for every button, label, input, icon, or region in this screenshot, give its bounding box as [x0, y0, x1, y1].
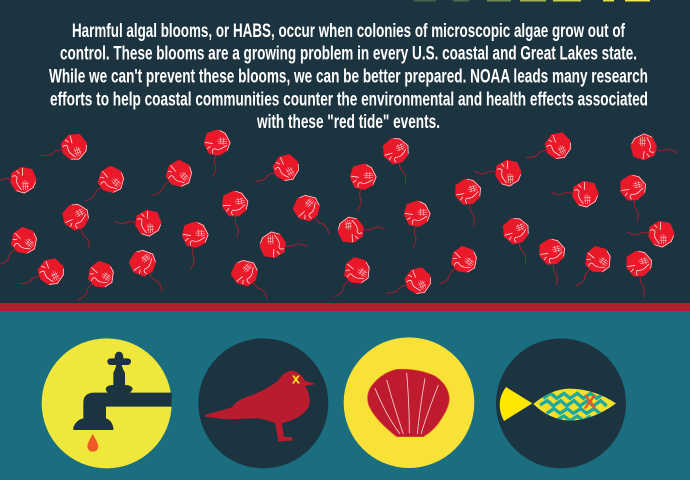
intro text block	[49, 20, 648, 133]
icon: shell in yellow circle	[344, 337, 474, 468]
intro text block: with these "red tide" events.	[256, 111, 440, 133]
red band divider	[0, 303, 690, 311]
icon: fish in dark circle: X	[584, 392, 597, 413]
background: dark upper panel	[0, 0, 690, 304]
icon: seabird in dark circle: x	[292, 372, 301, 388]
icon: faucet in yellow circle	[42, 338, 172, 468]
icon: seabird in dark circle	[198, 338, 328, 468]
red tide algae field	[0, 129, 680, 309]
teal lower panel	[0, 311, 690, 480]
icon: fish in dark circle	[496, 338, 626, 468]
title fragment cut off at top edge	[414, 0, 650, 2]
